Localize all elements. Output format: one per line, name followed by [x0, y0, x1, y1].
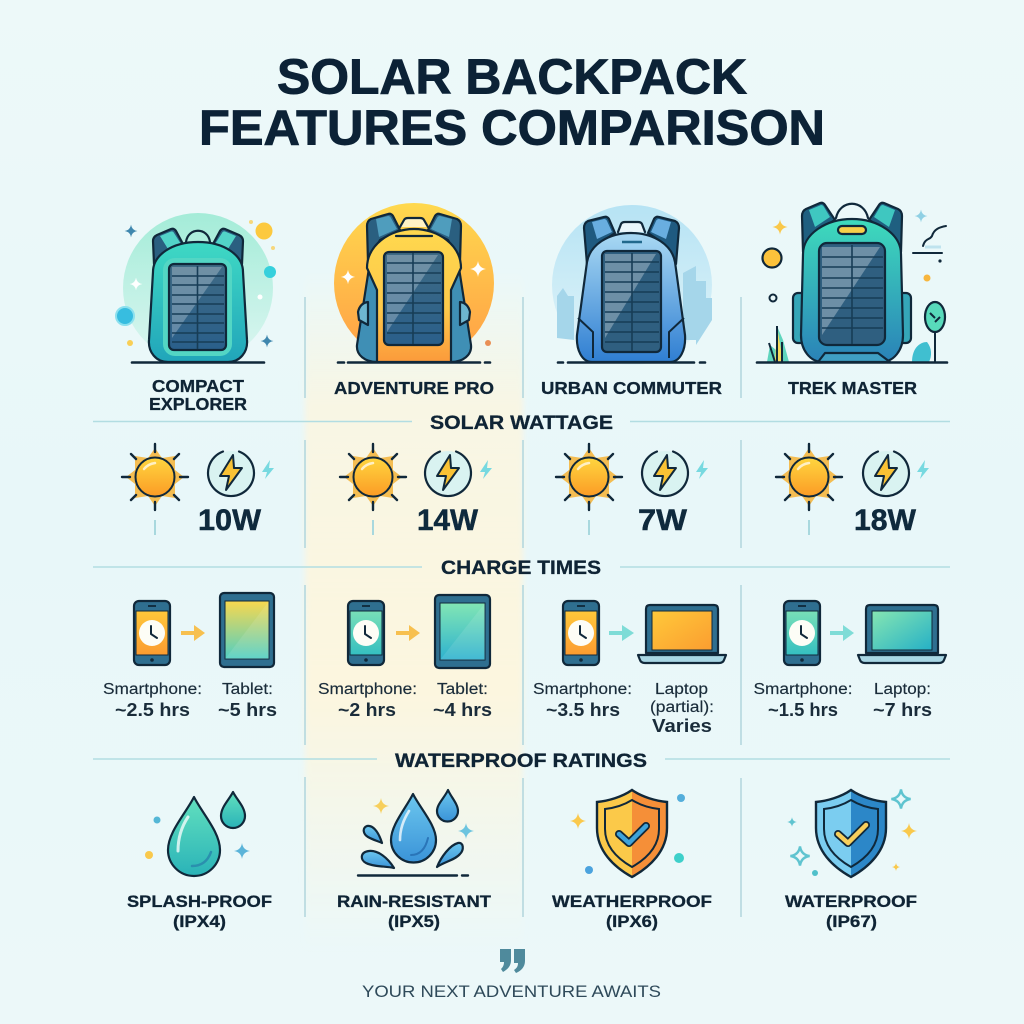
- rating: waterproof IP67: WATERPROOF: [785, 892, 917, 911]
- backpack names: ADVENTURE PRO: [334, 378, 494, 398]
- charge times: Trek Master: [754, 601, 946, 720]
- rating: rain-resistant IPX5: [337, 790, 492, 931]
- wattage: Trek Master 18W: 18W: [854, 504, 917, 537]
- rating: rain-resistant IPX5: RAIN-RESISTANT: [337, 892, 492, 911]
- backpack: Adventure Pro: [334, 203, 494, 363]
- backpack names: EXPLORER: [149, 394, 247, 414]
- rating: weatherproof IPX6: [552, 790, 712, 931]
- charge times: Trek Master: ~7 hrs: [873, 699, 932, 720]
- footer tagline: YOUR NEXT ADVENTURE AWAITS: [362, 982, 661, 1001]
- backpack: Urban Commuter: [552, 205, 712, 365]
- rating: splash-proof IPX4: SPLASH-PROOF: [127, 892, 272, 911]
- charge times: Adventure Pro: ~4 hrs: [433, 699, 492, 720]
- heading: waterproof ratings: WATERPROOF RATINGS: [395, 750, 647, 772]
- rating: weatherproof IPX6: (IPX6): [606, 912, 658, 931]
- rating: weatherproof IPX6: WEATHERPROOF: [552, 892, 712, 911]
- wattage: Trek Master 18W: [776, 444, 929, 537]
- title: [199, 50, 825, 156]
- charge times: Trek Master: Smartphone:: [754, 681, 852, 698]
- rating: rain-resistant IPX5: (IPX5): [388, 912, 440, 931]
- charge times: Adventure Pro: [318, 595, 492, 720]
- wattage: Urban Commuter 7W: [556, 444, 708, 537]
- charge times: Urban Commuter: (partial):: [650, 699, 714, 716]
- icon: quotation mark: [500, 949, 525, 973]
- heading: charge times: CHARGE TIMES: [441, 557, 601, 579]
- wattage: Adventure Pro 14W: [340, 444, 492, 537]
- charge times: Compact Explorer: Smartphone:: [103, 681, 202, 698]
- charge times: Compact Explorer: ~5 hrs: [218, 699, 277, 720]
- charge times: Compact Explorer: Tablet:: [222, 681, 273, 698]
- backpack names: COMPACT: [152, 376, 244, 396]
- wattage: Compact Explorer 10W: [122, 444, 274, 537]
- section rules: [93, 422, 950, 759]
- highlighted column: Adventure Pro: [305, 270, 523, 950]
- backpack: Trek Master: [757, 203, 947, 362]
- rating: waterproof IP67: (IP67): [826, 912, 877, 931]
- rating: splash-proof IPX4: [127, 792, 272, 931]
- charge times: Trek Master: ~1.5 hrs: [768, 699, 838, 720]
- charge times: Urban Commuter: [533, 601, 726, 736]
- backpack names: URBAN COMMUTER: [541, 378, 722, 398]
- charge times: Adventure Pro: Tablet:: [437, 681, 488, 698]
- charge times: Trek Master: Laptop:: [874, 681, 931, 698]
- rating: waterproof IP67: [785, 789, 917, 931]
- backpack names: [149, 376, 917, 414]
- charge times: Adventure Pro: ~2 hrs: [338, 699, 396, 720]
- backpack names: TREK MASTER: [788, 378, 917, 398]
- charge times: Compact Explorer: [103, 593, 277, 720]
- charge times: Urban Commuter: ~3.5 hrs: [546, 699, 620, 720]
- charge times: Urban Commuter: Smartphone:: [533, 681, 632, 698]
- wattage: Compact Explorer 10W: 10W: [198, 504, 262, 537]
- wattage: Adventure Pro 14W: 14W: [417, 504, 479, 537]
- charge times: Compact Explorer: ~2.5 hrs: [115, 699, 190, 720]
- charge times: Urban Commuter: Laptop: [655, 681, 708, 698]
- charge times: Adventure Pro: Smartphone:: [318, 681, 417, 698]
- title: SOLAR BACKPACK: [277, 50, 747, 104]
- title: FEATURES COMPARISON: [199, 102, 825, 156]
- charge times: Urban Commuter: Varies: [652, 715, 712, 736]
- column dividers: [305, 297, 741, 917]
- heading: solar wattage: SOLAR WATTAGE: [430, 412, 613, 434]
- backpack: Compact Explorer: [116, 213, 276, 363]
- rating: splash-proof IPX4: (IPX4): [173, 912, 226, 931]
- wattage: Urban Commuter 7W: 7W: [638, 504, 688, 537]
